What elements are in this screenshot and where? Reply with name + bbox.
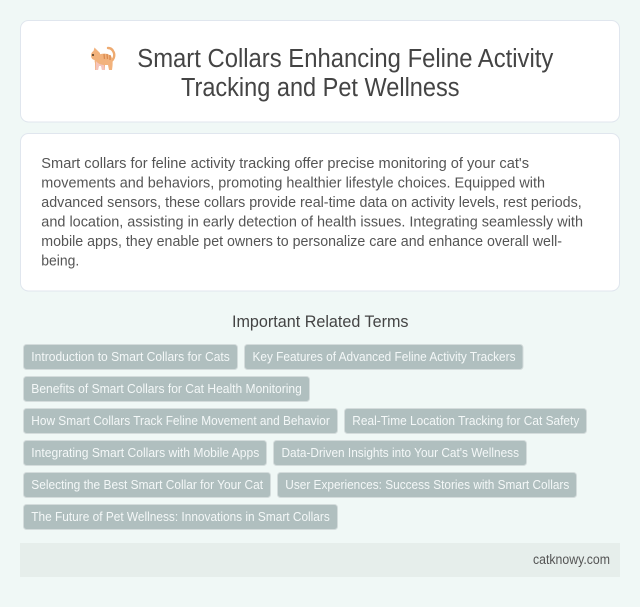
tag list bbox=[24, 344, 586, 530]
heading: related terms: Important Related Terms bbox=[232, 313, 408, 331]
tag bbox=[24, 344, 238, 370]
description text: being. bbox=[41, 252, 79, 270]
description text: movements and behaviors, promoting healthier lifestyle choices. Equipped with bbox=[41, 174, 545, 192]
tag bbox=[24, 472, 270, 498]
tag: User Experiences: Success Stories with Smart Collars bbox=[285, 477, 570, 492]
title bbox=[137, 45, 554, 102]
description text: and location, assisting in early detection of health issues. Integrating seamlessly with bbox=[41, 214, 583, 230]
description text: Smart collars for feline activity tracking offer precise monitoring of your cat's bbox=[41, 155, 529, 172]
tag bbox=[24, 408, 338, 434]
tag: Benefits of Smart Collars for Cat Health Monitoring bbox=[31, 381, 302, 396]
tag bbox=[274, 440, 526, 466]
tag bbox=[24, 440, 266, 466]
tag bbox=[278, 472, 576, 498]
tag: Key Features of Advanced Feline Activity Trackers bbox=[252, 349, 516, 364]
tag bbox=[24, 376, 310, 402]
tag bbox=[244, 344, 523, 370]
description text: mobile apps, they enable pet owners to personalize care and enhance overall well- bbox=[41, 233, 562, 250]
footer source text: catknowy.com bbox=[533, 552, 610, 567]
tag: The Future of Pet Wellness: Innovations in Smart Collars bbox=[31, 509, 330, 524]
tag bbox=[344, 408, 586, 434]
tag: Integrating Smart Collars with Mobile Apps bbox=[31, 445, 260, 460]
description text bbox=[41, 155, 583, 270]
title: Tracking and Pet Wellness bbox=[181, 74, 460, 102]
icon: cat bbox=[91, 48, 114, 70]
tag bbox=[24, 504, 338, 530]
description text: advanced sensors, these collars provide real-time data on activity levels, rest periods, bbox=[41, 194, 582, 211]
panel: description bbox=[20, 134, 620, 291]
panel: title card bbox=[20, 20, 620, 122]
tag: Real-Time Location Tracking for Cat Safety bbox=[352, 413, 580, 428]
tag: Data-Driven Insights into Your Cat's Wellness bbox=[282, 445, 519, 460]
tag: Selecting the Best Smart Collar for Your Cat bbox=[31, 477, 263, 492]
tag: How Smart Collars Track Feline Movement and Behavior bbox=[31, 413, 330, 428]
title: Smart Collars Enhancing Feline Activity bbox=[137, 45, 554, 73]
tag: Introduction to Smart Collars for Cats bbox=[31, 349, 230, 364]
footer bbox=[20, 543, 620, 577]
